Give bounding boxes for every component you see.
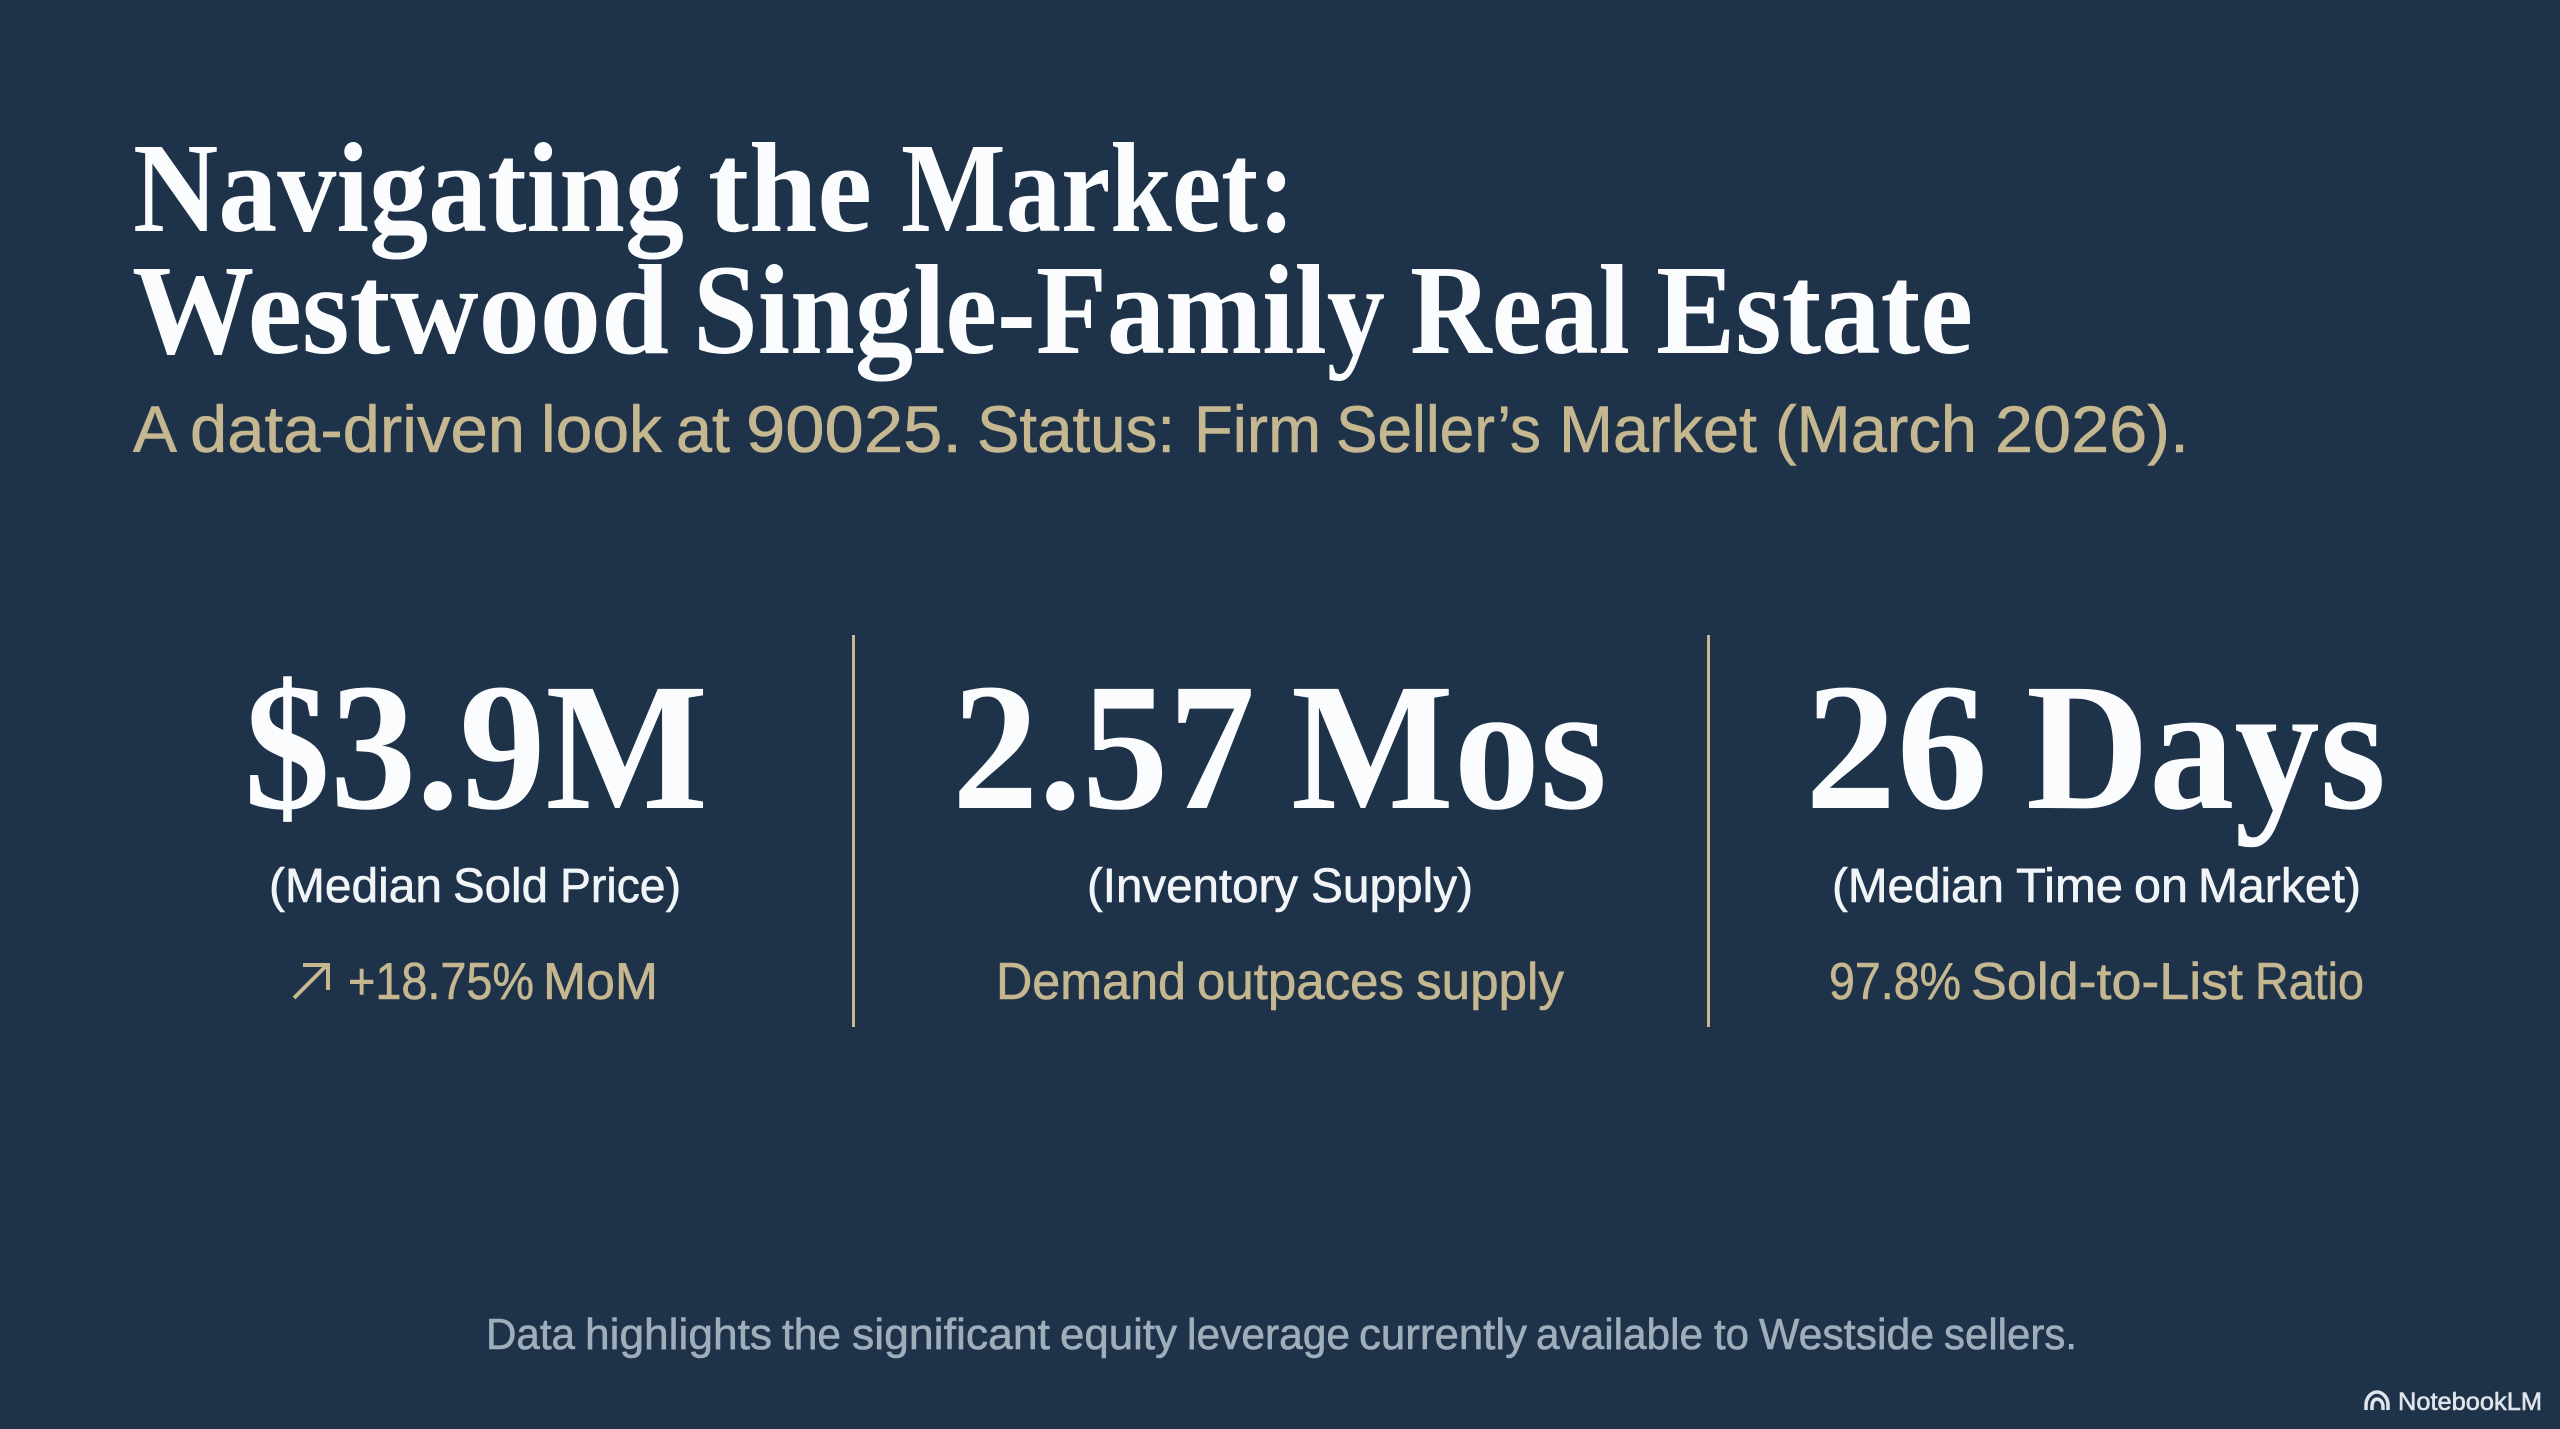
label: median time on market: Time: [2016, 860, 2123, 913]
note: sold-to-list ratio: [1829, 953, 2364, 1011]
footer note: leverage: [1187, 1310, 1350, 1359]
subtitle: at: [676, 392, 730, 466]
label: median sold price: (Median: [269, 860, 442, 913]
panel: median time on market: [1805, 647, 2386, 1011]
label: median sold price: Price): [560, 860, 681, 913]
metric: 26 Days: [1805, 647, 2386, 848]
footer note: currently: [1359, 1310, 1527, 1359]
footer note: sellers.: [1944, 1310, 2077, 1359]
divider: [852, 635, 855, 1027]
note: demand: supply: [1416, 953, 1564, 1011]
subtitle: 2026).: [1995, 392, 2189, 466]
metric: 26 Days: 26: [1805, 647, 1988, 848]
title: Single-Family: [693, 239, 1385, 381]
label: inventory supply: [1087, 860, 1473, 913]
watermark: NotebookLM: [2366, 1388, 2542, 1416]
note: sold-to-list ratio: Ratio: [2255, 953, 2364, 1011]
note: demand: outpaces: [1197, 953, 1404, 1011]
note: demand: Demand: [996, 953, 1186, 1011]
subtitle: look: [541, 392, 663, 466]
footer note: the: [782, 1310, 841, 1359]
label: median time on market: Market): [2198, 860, 2361, 913]
label: median time on market: (Median: [1832, 860, 2004, 913]
panel: median sold price: [244, 647, 708, 1011]
metric: 2.57 Mos: Mos: [1291, 647, 1607, 848]
note: sold-to-list ratio: 97.8%: [1829, 953, 1961, 1011]
footer note: [486, 1310, 2077, 1359]
subtitle: Firm: [1194, 392, 1321, 466]
subtitle: 90025.: [746, 392, 962, 466]
metric: 2.57 Mos: 2.57: [952, 647, 1255, 848]
label: inventory supply: Supply): [1311, 860, 1473, 913]
wordmark: NotebookLM: [2398, 1388, 2542, 1416]
label: median time on market: on: [2134, 860, 2188, 913]
divider: [1707, 635, 1710, 1027]
subtitle: Seller’s: [1336, 392, 1541, 466]
footer note: significant: [852, 1310, 1050, 1359]
panel: inventory supply: [952, 647, 1607, 1011]
subtitle: Status:: [977, 392, 1175, 466]
footer note: available: [1536, 1310, 1703, 1359]
label: median time on market: [1832, 860, 2361, 913]
note: demand: [996, 953, 1564, 1011]
footer note: Data: [486, 1310, 575, 1359]
subtitle: A: [133, 392, 177, 466]
subtitle: (March: [1775, 392, 1977, 466]
label: inventory supply: (Inventory: [1087, 860, 1298, 913]
metric: $3.9M: $3.9M: [244, 647, 708, 848]
note: month over month change: MoM: [543, 953, 658, 1011]
note: month over month change: [348, 953, 658, 1011]
title: Real: [1410, 239, 1630, 381]
metric: 2.57 Mos: [952, 647, 1607, 848]
title: the: [708, 117, 872, 259]
icon: NotebookLM arcs: [2366, 1392, 2388, 1410]
title: Market:: [901, 117, 1295, 259]
footer note: Westside: [1759, 1310, 1934, 1359]
note: month over month change: +18.75%: [348, 953, 534, 1011]
label: median sold price: Sold: [453, 860, 548, 913]
title: Westwood: [132, 239, 669, 381]
title: Estate: [1656, 239, 1973, 381]
subtitle: Market: [1559, 392, 1757, 466]
footer note: highlights: [585, 1310, 772, 1359]
label: median sold price: [269, 860, 681, 913]
metric: 26 Days: Days: [2026, 647, 2386, 848]
subtitle: data-driven: [190, 392, 525, 466]
subtitle: [133, 392, 2189, 466]
footer note: equity: [1060, 1310, 1177, 1359]
icon: up-right arrow: [294, 965, 328, 998]
note: sold-to-list ratio: Sold-to-List: [1971, 953, 2244, 1011]
footer note: to: [1714, 1310, 1749, 1359]
title: Navigating: [133, 117, 684, 259]
title: [132, 117, 1973, 381]
